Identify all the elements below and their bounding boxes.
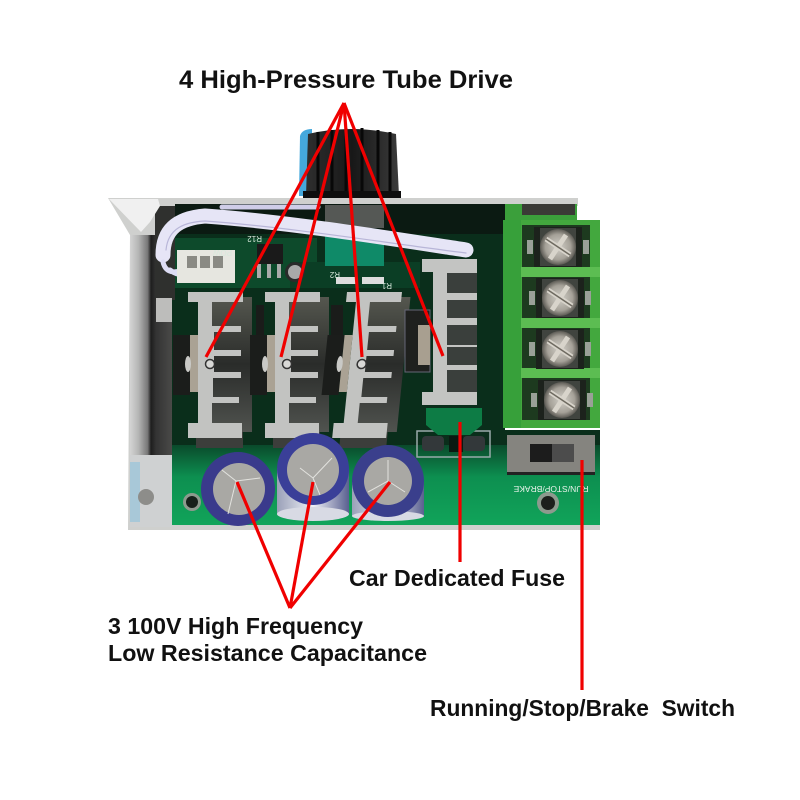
label: fuse: Car Dedicated Fuse — [349, 565, 565, 591]
arrow: switch — [580, 460, 584, 690]
label: capacitors — [108, 613, 427, 666]
teal potentiometer block — [325, 205, 384, 266]
icon: speed knob — [299, 128, 401, 199]
control chip and small parts — [212, 234, 392, 335]
transistor 4 — [405, 310, 430, 372]
white ribbon wire — [163, 207, 466, 277]
arrow: fuse — [458, 422, 462, 562]
slide switch: RUN/STOP/BRAKE — [513, 484, 588, 494]
green terminal block — [503, 204, 600, 428]
heat sink 3 — [316, 292, 411, 448]
label: capacitors: Low Resistance Capacitance — [108, 640, 427, 666]
control chip and small parts: R12 — [247, 234, 262, 243]
title: 4 High-Pressure Tube Drive — [179, 66, 513, 94]
slide switch — [507, 435, 595, 494]
capacitor 3 — [352, 445, 424, 521]
icon: terminal screw 3 — [529, 329, 591, 369]
heat sink 2 — [250, 292, 329, 448]
arrows: high-pressure tube drive — [206, 103, 443, 357]
automotive fuse — [417, 408, 490, 457]
control chip and small parts: R2 — [329, 270, 340, 279]
control chip and small parts: POW — [212, 248, 232, 257]
panel: controller board photo — [108, 128, 600, 530]
capacitor 1 — [201, 452, 275, 526]
capacitor 2 — [277, 433, 349, 521]
circuit board — [172, 204, 600, 525]
label: capacitors: 3 100V High Frequency — [108, 613, 363, 639]
mounting hole — [183, 492, 559, 514]
arrows: capacitors — [237, 482, 390, 608]
control chip and small parts: R1 — [381, 281, 392, 290]
label: switch: Running/Stop/Brake Switch — [430, 695, 735, 721]
icon: terminal screw 1 — [527, 227, 589, 267]
white connector — [177, 250, 235, 283]
icon: terminal screw 4 — [531, 380, 593, 420]
heat sink 4 — [422, 259, 477, 405]
metal frame — [108, 198, 600, 530]
heat sink 1 — [173, 292, 252, 448]
icon: terminal screw 2 — [529, 278, 591, 318]
